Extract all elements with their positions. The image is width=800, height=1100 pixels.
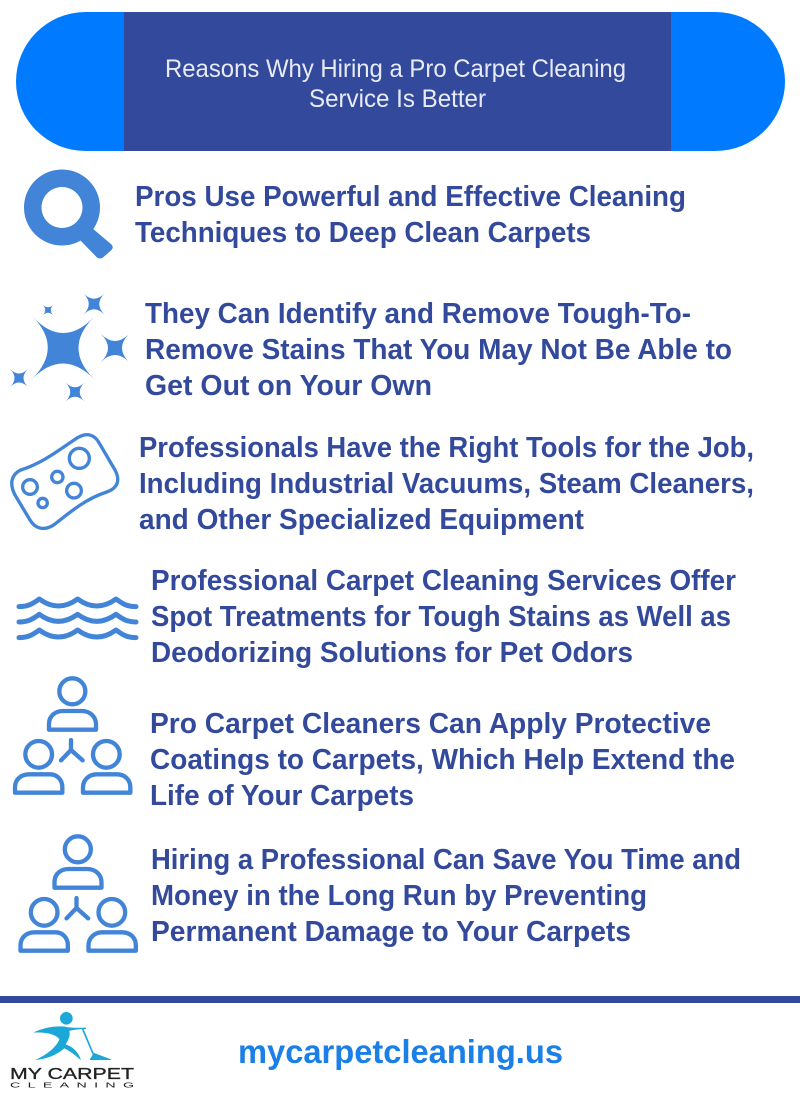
reason 2 text: Remove Stains That You May Not Be Able to bbox=[145, 334, 732, 366]
reason 4 text: Spot Treatments for Tough Stains as Well as bbox=[151, 601, 731, 633]
reason 5: protective coatings bbox=[15, 678, 735, 812]
icon: sparkles bbox=[10, 294, 129, 402]
title: Reasons Why Hiring a Pro Carpet Cleaning bbox=[165, 55, 626, 83]
icon: magnifying glass bbox=[24, 170, 113, 258]
reason 6 text: Hiring a Professional Can Save You Time and bbox=[151, 844, 741, 876]
footer divider bar bbox=[0, 996, 800, 1003]
reason 3 text: Including Industrial Vacuums, Steam Cleaners, bbox=[139, 468, 754, 500]
icon: people group bbox=[20, 836, 136, 951]
logo tagline: CLEANING bbox=[10, 1081, 134, 1089]
logo wordmark: MY CARPET bbox=[10, 1066, 134, 1083]
reason 3: right tools bbox=[12, 432, 754, 536]
reason 6 text: Permanent Damage to Your Carpets bbox=[151, 916, 631, 948]
reason 1 text: Techniques to Deep Clean Carpets bbox=[135, 217, 591, 249]
reason 1 text: Pros Use Powerful and Effective Cleaning bbox=[135, 181, 686, 213]
reason 5 text: Coatings to Carpets, Which Help Extend the bbox=[150, 744, 735, 776]
reason 1: powerful cleaning techniques bbox=[24, 170, 686, 258]
reason 3 text: and Other Specialized Equipment bbox=[139, 504, 584, 536]
title: Service Is Better bbox=[309, 85, 486, 113]
icon: waves bbox=[19, 599, 136, 638]
icon: people group bbox=[15, 678, 130, 793]
reason 2 text: They Can Identify and Remove Tough-To- bbox=[145, 298, 691, 330]
reason 2 text: Get Out on Your Own bbox=[145, 370, 432, 402]
reason 4: spot treatments bbox=[19, 565, 736, 669]
reason 2: tough stains bbox=[10, 294, 732, 402]
reason 4 text: Deodorizing Solutions for Pet Odors bbox=[151, 637, 633, 669]
reason 4 text: Professional Carpet Cleaning Services Offer bbox=[151, 565, 736, 597]
reason 5 text: Pro Carpet Cleaners Can Apply Protective bbox=[150, 708, 711, 740]
header banner bbox=[16, 12, 785, 151]
banner centre panel bbox=[124, 12, 671, 151]
reason 6: save time and money bbox=[20, 836, 741, 951]
reason 5 text: Life of Your Carpets bbox=[150, 780, 414, 812]
icon: sponge bbox=[12, 435, 118, 528]
banner pill background bbox=[16, 12, 785, 151]
reason 3 text: Professionals Have the Right Tools for the Job, bbox=[139, 432, 754, 464]
reason 6 text: Money in the Long Run by Preventing bbox=[151, 880, 647, 912]
footer website URL: mycarpetcleaning.us bbox=[238, 1033, 563, 1070]
logo figure bbox=[33, 1012, 111, 1060]
footer logo bbox=[10, 1012, 134, 1089]
